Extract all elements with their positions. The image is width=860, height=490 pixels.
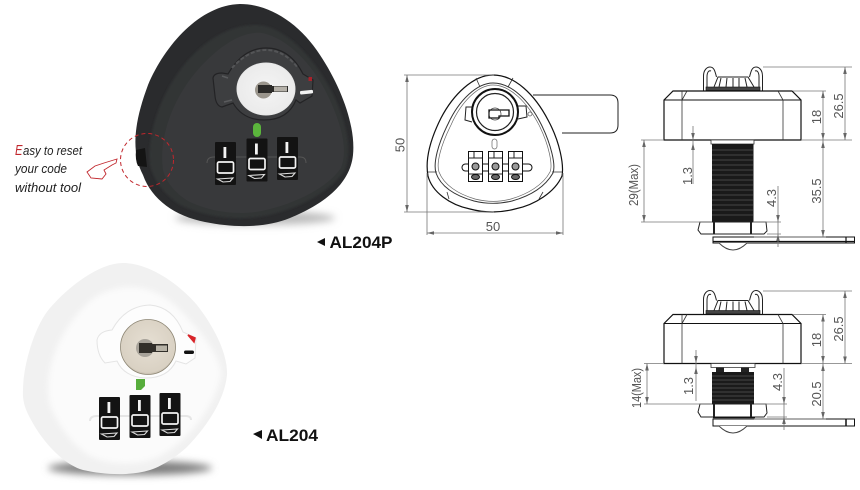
callout text: your code	[14, 162, 67, 176]
reset button	[136, 148, 147, 167]
callout: easy to reset	[14, 134, 173, 195]
dial	[465, 89, 532, 135]
dimension labels: 1.3	[680, 167, 695, 185]
dimension labels: 20.5	[809, 381, 824, 407]
inner outline	[435, 83, 554, 203]
lock face	[48, 287, 221, 464]
keyway	[255, 82, 288, 98]
dimension: height 50: 50	[392, 138, 408, 152]
green indicator	[253, 123, 261, 137]
thread	[712, 372, 754, 404]
dimension labels: 18	[809, 333, 824, 347]
dome	[719, 426, 747, 433]
icon: pointing hand	[87, 159, 117, 179]
collar	[711, 364, 755, 368]
indicator	[492, 139, 497, 149]
lock body	[135, 4, 353, 226]
dimension labels: 29(Max)	[626, 164, 641, 206]
dimension labels	[629, 316, 846, 408]
wheels	[462, 152, 532, 182]
cam plate	[533, 95, 618, 133]
thread	[712, 144, 754, 222]
panel: side view AL204 drawing	[629, 290, 854, 433]
panel: side view AL204P drawing	[626, 67, 854, 250]
combination dial ring	[213, 48, 313, 120]
callout text: without tool	[15, 181, 82, 195]
lock front face	[162, 33, 344, 213]
dimension labels: 4.3	[770, 373, 785, 391]
callout ring	[120, 134, 174, 186]
code wheels	[207, 137, 306, 185]
nut	[698, 222, 767, 234]
lock body	[23, 263, 227, 474]
plate	[713, 237, 854, 243]
dome	[719, 243, 747, 250]
label: AL204: AL204	[266, 427, 319, 445]
callout text: E	[15, 142, 23, 159]
callout text	[14, 142, 82, 195]
lock bezel band	[149, 25, 348, 218]
lock profile	[664, 290, 801, 364]
green indicator	[136, 379, 145, 390]
plate	[713, 419, 854, 426]
callout text: asy to reset	[23, 144, 82, 158]
dimension labels: 26.5	[831, 93, 846, 119]
dimension labels: 26.5	[831, 316, 846, 342]
key cylinder	[120, 320, 176, 374]
keyway	[136, 339, 168, 357]
collar	[711, 140, 754, 144]
panel: front view technical drawing	[392, 75, 618, 235]
lock profile	[664, 67, 801, 140]
key cylinder	[236, 62, 296, 116]
dimension lines	[641, 67, 852, 247]
dimension lines	[644, 291, 852, 430]
lock shadow	[175, 211, 335, 225]
combination dial ring	[97, 305, 196, 378]
dimension labels: 1.3	[681, 377, 696, 395]
dimension: width 50: 50	[486, 219, 500, 234]
dimension labels: 4.3	[764, 189, 779, 207]
code wheels	[90, 393, 191, 440]
panel: black lock AL204P photo	[135, 4, 353, 226]
lock shadow	[48, 461, 212, 475]
dimension: height 50	[392, 75, 494, 212]
dimension labels	[626, 93, 846, 207]
dimension labels: 35.5	[809, 178, 824, 204]
nut	[698, 404, 767, 417]
label: AL204P: AL204P	[330, 234, 392, 252]
panel: white lock AL204 photo	[23, 263, 227, 475]
dimension labels: 18	[809, 110, 824, 124]
dimension labels: 14(Max)	[629, 368, 644, 408]
outer outline	[427, 75, 562, 212]
dimension: width 50	[427, 173, 563, 235]
